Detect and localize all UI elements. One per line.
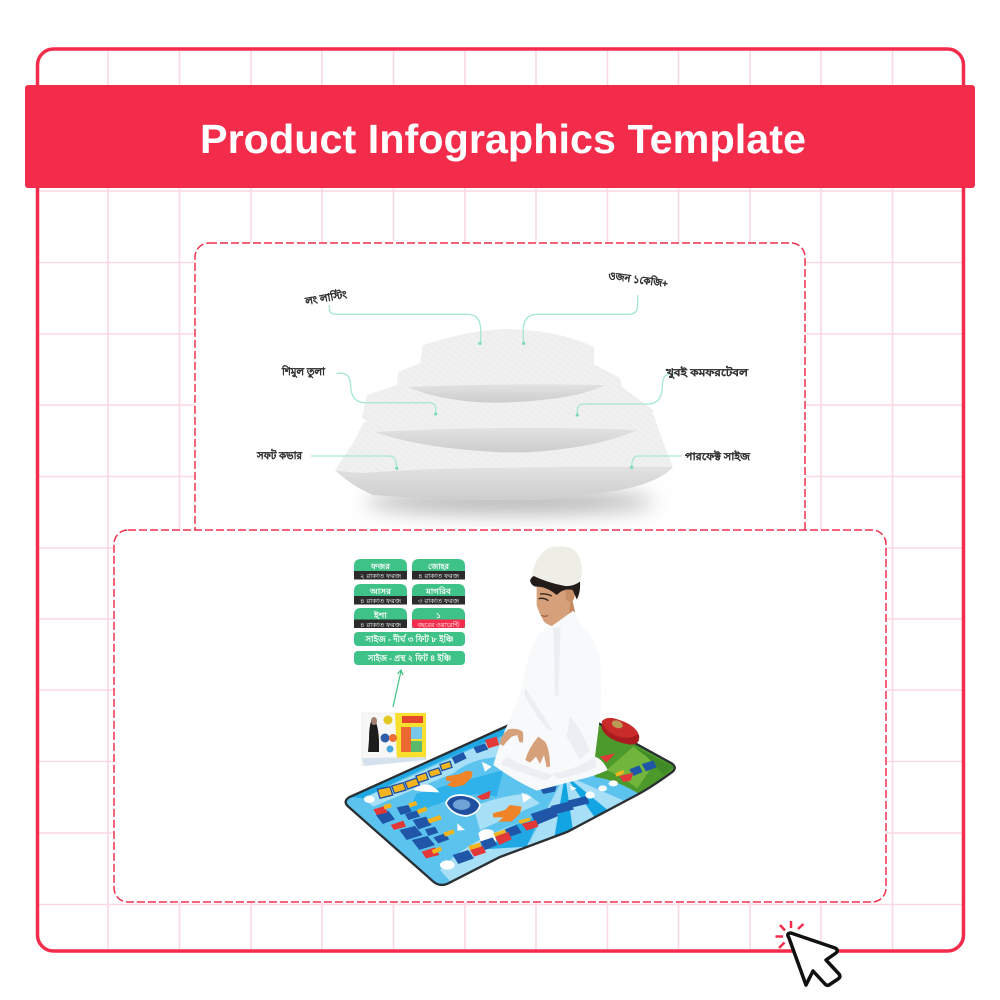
pill: isha bbox=[354, 608, 407, 629]
mat: green end bbox=[594, 724, 674, 794]
pill: maghrib bbox=[412, 584, 465, 605]
hands bbox=[500, 729, 550, 767]
connector: cotton bbox=[337, 373, 436, 414]
pill: length: সাইজ - দীর্ঘ ৩ ফিট ৮ ইঞ্চি bbox=[364, 632, 454, 644]
label: simul cotton: শিমুল তুলা bbox=[281, 364, 326, 379]
speaker bbox=[602, 718, 639, 745]
title banner bbox=[25, 85, 975, 188]
product box bbox=[362, 713, 426, 766]
cursor icon bbox=[776, 921, 840, 985]
label: long lasting: লং লাস্টিং bbox=[303, 287, 348, 308]
connector: soft cover bbox=[311, 456, 397, 468]
pill: zuhr: ৪ রাকাত ফরজ bbox=[418, 573, 460, 580]
pill: maghrib: মাগরিব bbox=[425, 586, 452, 596]
pill: fajr bbox=[354, 559, 407, 580]
connector: perfect size bbox=[632, 456, 682, 467]
boy praying bbox=[493, 546, 639, 791]
mat: dark rim bbox=[346, 702, 675, 885]
pill: fajr: ফজর bbox=[370, 562, 391, 571]
prayer mat bbox=[344, 722, 676, 886]
pill: warranty: ১ bbox=[436, 611, 441, 620]
mat: clouds bbox=[413, 762, 577, 845]
panel: prayer mat product bbox=[114, 530, 886, 902]
mat: red cells bbox=[373, 737, 633, 858]
connector: comfortable bbox=[577, 374, 676, 415]
pill: asr: ৪ রাকাত ফরজ bbox=[360, 598, 402, 605]
pill: maghrib: ৩ রাকাত ফরজ bbox=[418, 598, 460, 605]
panel: pillow product bbox=[195, 243, 805, 543]
label: soft cover: সফট কভার bbox=[256, 448, 303, 462]
label: weight: ওজন ১কেজি+ bbox=[608, 268, 669, 290]
hair bbox=[530, 576, 580, 599]
click sparks bbox=[776, 921, 804, 948]
cursor arrow bbox=[788, 933, 840, 985]
connector: weight bbox=[523, 295, 638, 343]
arrow: box to specs bbox=[393, 670, 403, 707]
pill: warranty bbox=[412, 608, 465, 629]
robe bbox=[493, 611, 608, 791]
pill: asr: আসর bbox=[369, 587, 392, 596]
mat: blue cells bbox=[376, 743, 657, 864]
pill: width: সাইজ - প্রস্থ ২ ফিট ৪ ইঞ্চি bbox=[367, 651, 452, 663]
neck and head bbox=[530, 546, 582, 627]
mat: small yellow tags bbox=[383, 770, 624, 854]
face details bbox=[539, 594, 552, 601]
label: very comfortable: খুবই কমফরটেবল bbox=[665, 365, 749, 380]
pill: asr bbox=[354, 584, 407, 605]
connector: long lasting bbox=[329, 305, 481, 343]
mat: wave bands bbox=[352, 728, 624, 881]
mat: center emblem bbox=[446, 795, 480, 816]
pill: isha: ইশা bbox=[373, 610, 388, 620]
title: Product Infographics Template bbox=[200, 116, 806, 162]
pill: isha: ৪ রাকাত ফরজ bbox=[360, 622, 402, 629]
pillow stack illustration bbox=[311, 295, 682, 514]
pill: zuhr: জোহর bbox=[428, 562, 450, 571]
pill: fajr: ২ রাকাত ফরজ bbox=[360, 573, 402, 580]
mat: orange hands bbox=[446, 771, 522, 822]
spec pills bbox=[354, 559, 465, 665]
mat: top row yellow cells bbox=[377, 761, 452, 798]
cap bbox=[532, 546, 582, 586]
mat: arrow badges bbox=[364, 780, 618, 870]
pill: zuhr bbox=[412, 559, 465, 580]
label: perfect size: পারফেক্ট সাইজ bbox=[685, 449, 752, 463]
pill: warranty: বছরের ওয়ারেন্টি bbox=[417, 621, 460, 629]
